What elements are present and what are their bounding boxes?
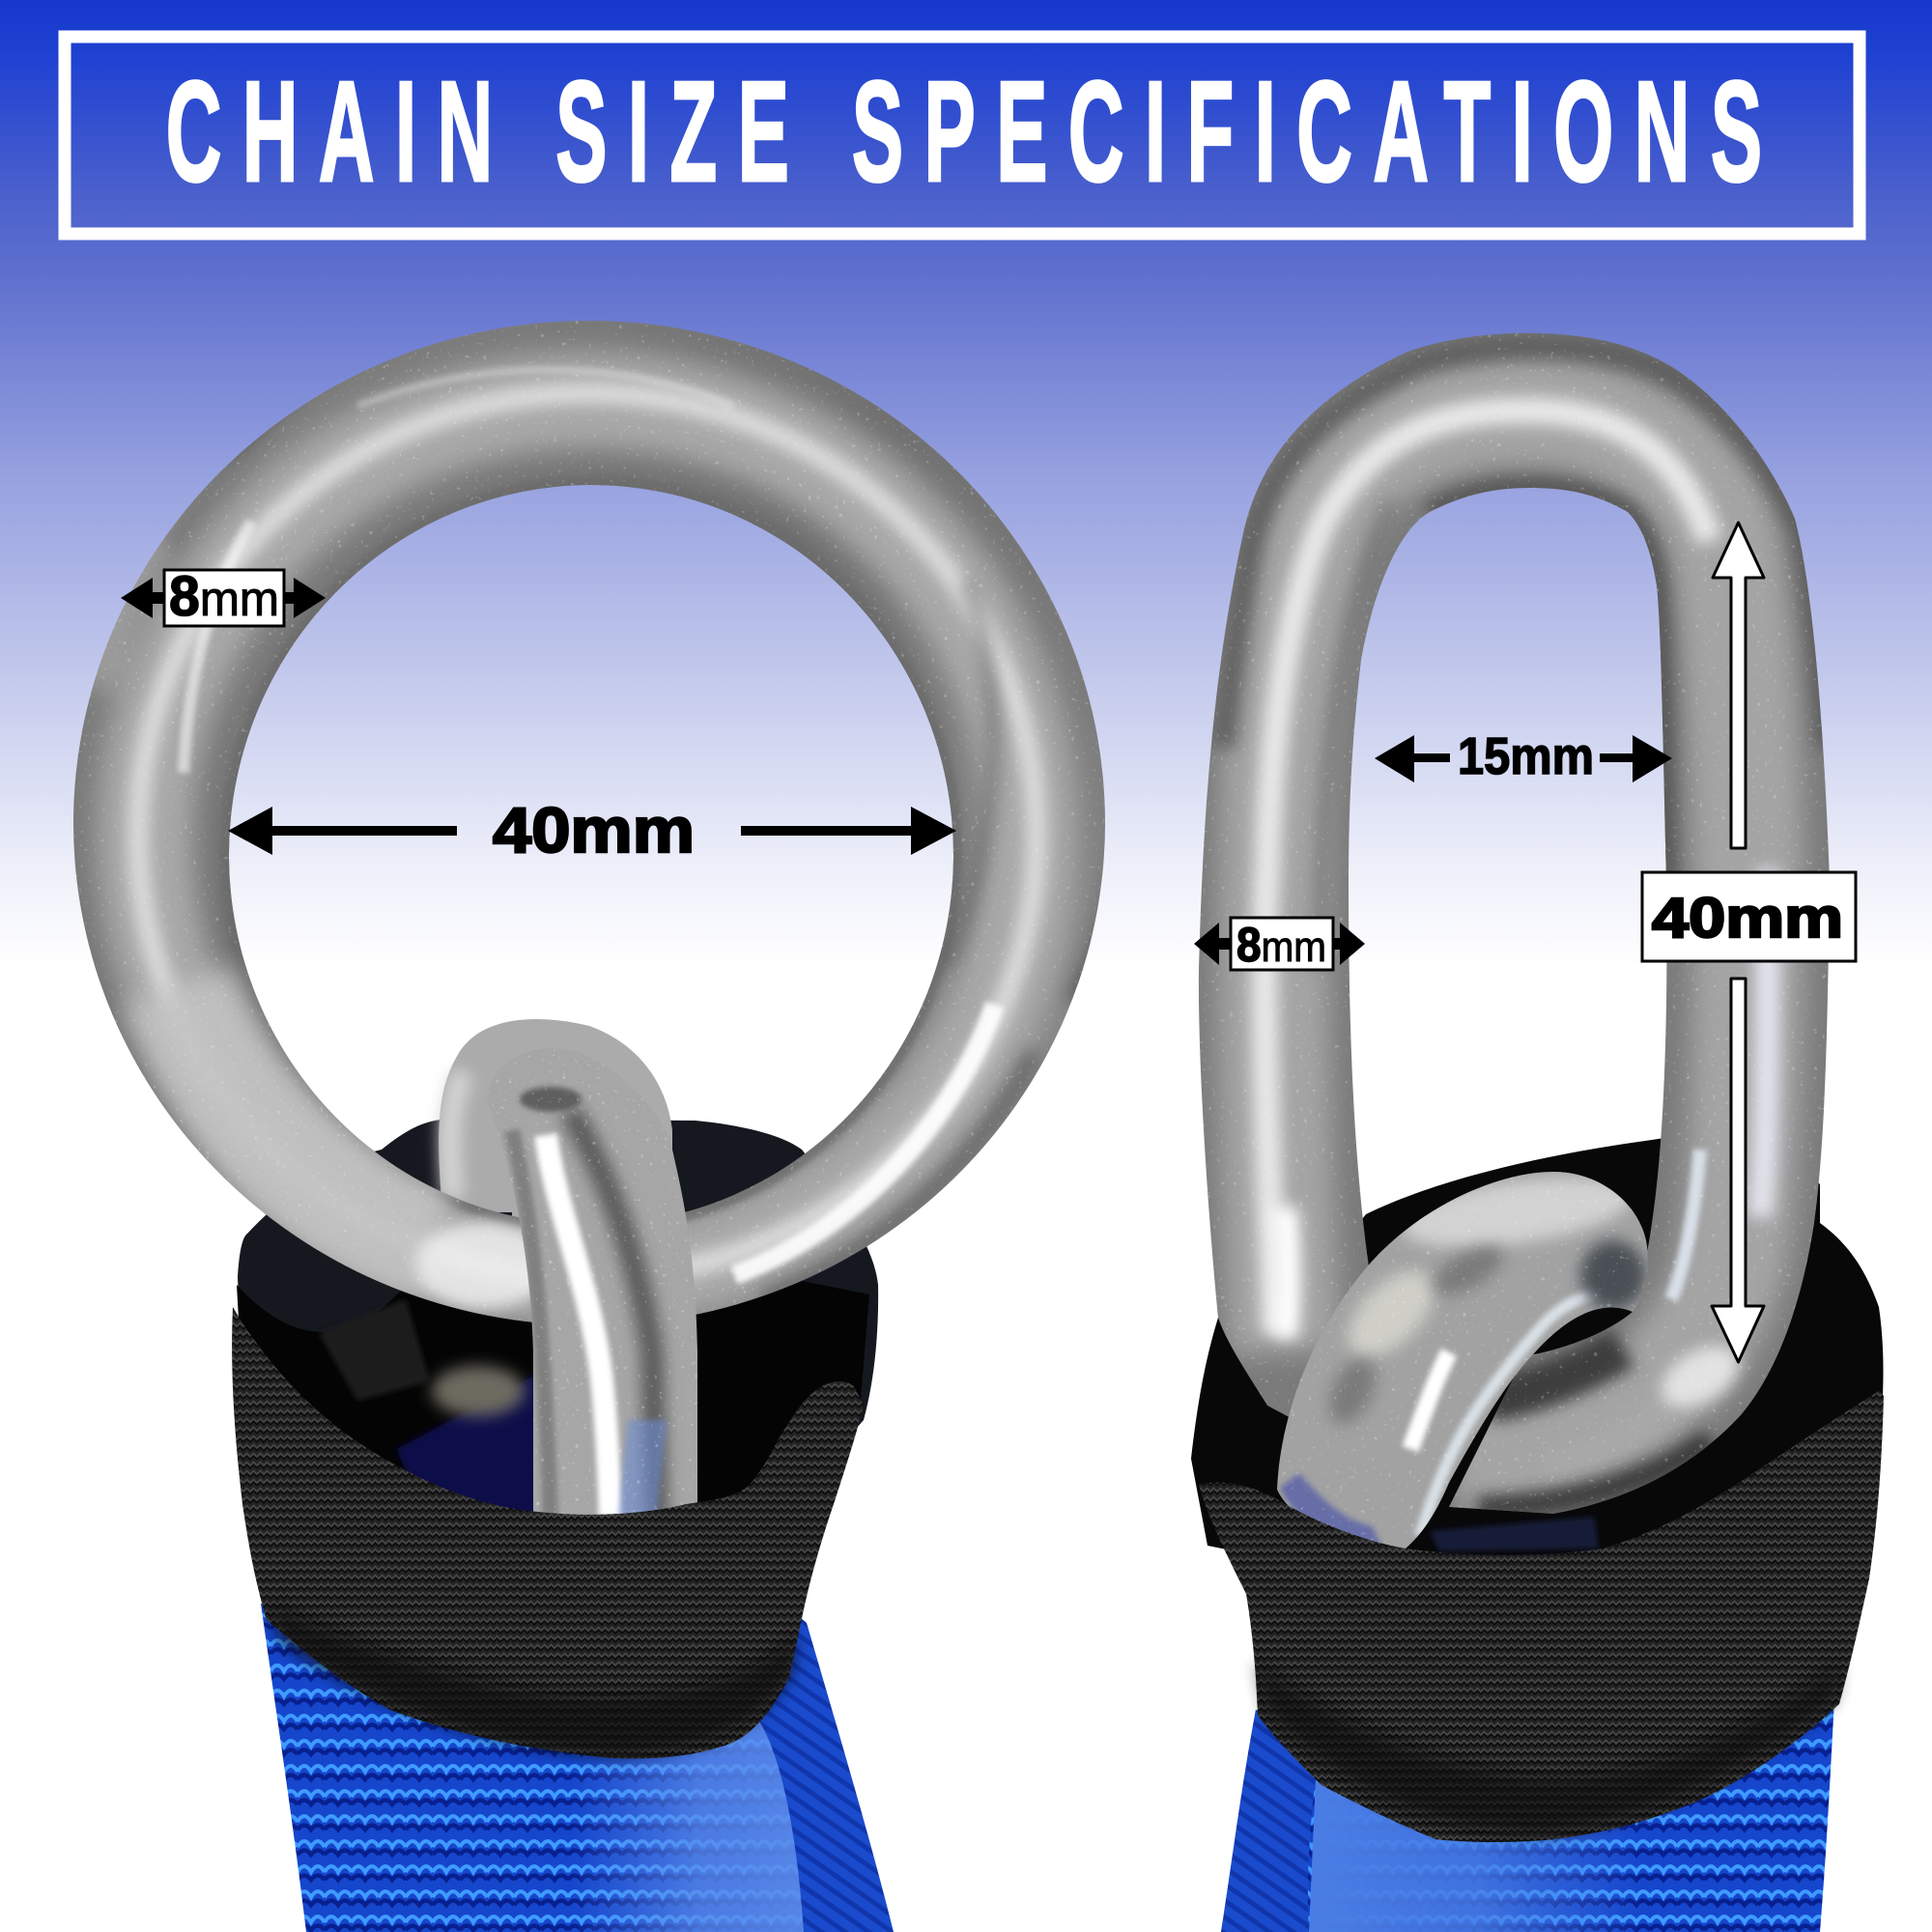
link inner width annotation: 15mm: 15mm — [1458, 727, 1594, 785]
title banner — [65, 37, 1860, 234]
right small chain link — [1265, 1164, 1662, 1555]
left ring with measurement surface — [73, 321, 1105, 1322]
link tube width annotation: 8mm — [1194, 918, 1365, 972]
right big chain link — [1188, 319, 1845, 1526]
ring inner diameter annotation: 40mm — [228, 794, 956, 866]
ring tube width annotation: 8mm: 8mm — [169, 565, 279, 628]
left sleeve: front fabric band — [232, 1307, 864, 1758]
right sleeve: front fabric band — [1199, 1391, 1884, 1842]
title text: CHAIN SIZE SPECIFICATIONS — [166, 52, 1762, 212]
right sleeve: rear and dark interior — [1191, 1137, 1884, 1584]
left sleeve: rear and dark interior — [237, 1119, 878, 1546]
link length annotation: white arrows and 40mm label — [1642, 523, 1856, 1362]
link tube width annotation: 8mm: 8mm — [1236, 918, 1326, 972]
left link: rear part — [439, 1019, 672, 1256]
link length annotation: white arrows and 40mm label: 40mm — [1652, 887, 1843, 950]
right strap: blue webbing — [1221, 1700, 1834, 1932]
left strap: blue webbing — [261, 1594, 894, 1932]
link inner width annotation: 15mm — [1375, 727, 1672, 785]
ring inner diameter annotation: 40mm: 40mm — [493, 794, 695, 866]
left link: front leg — [492, 1049, 697, 1515]
ring tube width annotation: 8mm — [121, 565, 326, 628]
